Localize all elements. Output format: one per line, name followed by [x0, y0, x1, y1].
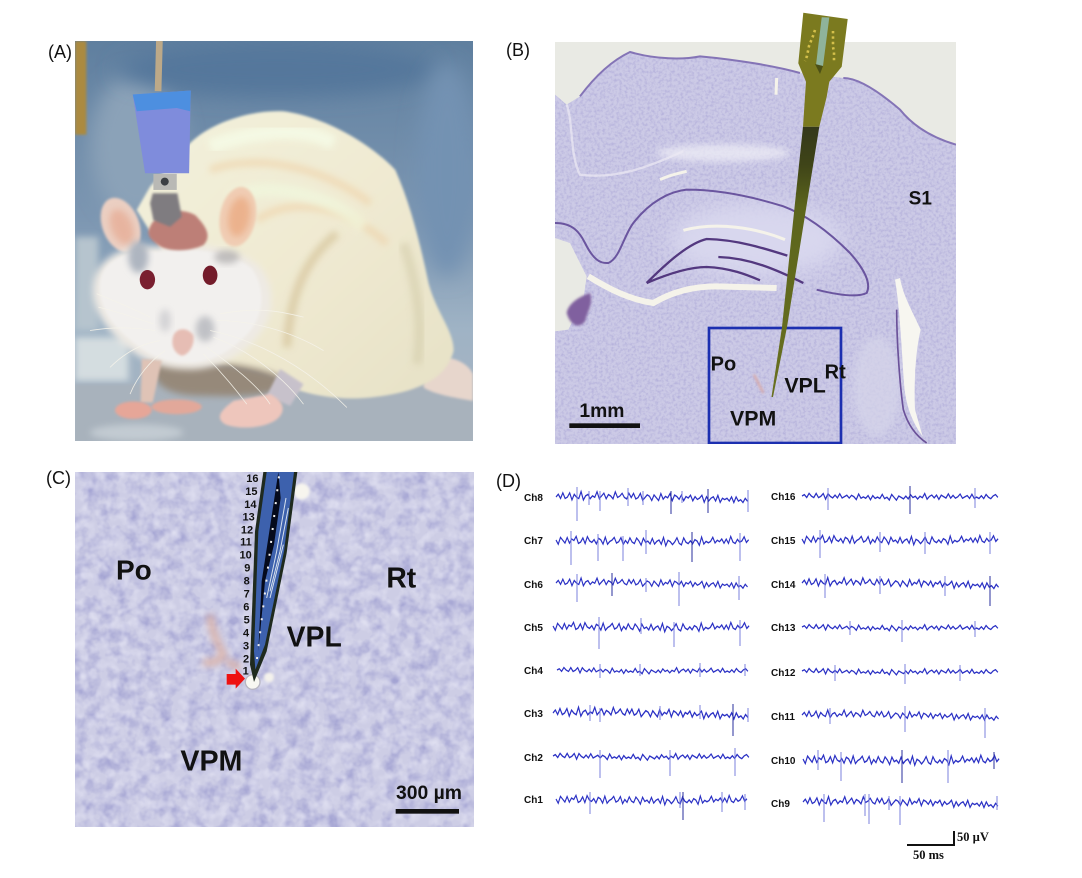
channel 16 [771, 486, 998, 514]
label: VPM: VPM [730, 407, 776, 431]
orange tissue trace [203, 615, 240, 668]
red arrow [227, 669, 245, 689]
probe tip [250, 472, 297, 682]
rat body [137, 111, 454, 398]
channel 10: Ch10 [771, 756, 796, 767]
channel 15: Ch15 [771, 536, 796, 547]
electrode site numbers: 7 [244, 589, 250, 601]
cortex edge [580, 52, 956, 145]
probe centre strip [816, 17, 829, 66]
scale bar: 50 ms / 50 µV [907, 830, 989, 862]
connector base with screw [153, 174, 177, 190]
channel 13 [771, 620, 998, 642]
lesion hole [245, 483, 310, 689]
panel label: (D): (D) [496, 471, 521, 491]
channel 10 [771, 750, 999, 783]
label: Po: Po [116, 555, 152, 586]
channel 9 [771, 794, 998, 825]
scale label: 300 µm: 300 µm [396, 783, 462, 804]
dentate gyrus [647, 239, 803, 283]
probe shank [772, 127, 819, 397]
blue region of interest box [709, 328, 841, 443]
panel label: (B): (B) [506, 40, 530, 60]
electrode site numbers: 11 [240, 537, 252, 549]
label: S1: S1 [909, 188, 932, 209]
channel 14: Ch14 [771, 580, 796, 591]
channel 14 [771, 574, 999, 606]
probe head [798, 13, 848, 127]
electrode site numbers: 15 [245, 486, 257, 498]
electrode site numbers: 1 [243, 666, 249, 678]
label: VPM: VPM [180, 746, 242, 778]
left paws [115, 399, 202, 419]
silicon probe overlay [772, 13, 848, 397]
electrode site numbers: 6 [243, 602, 249, 614]
left forelimb [141, 359, 162, 403]
panel B: brain section with probe [555, 42, 956, 444]
channel 9: Ch9 [771, 799, 790, 810]
electrode site numbers: 16 [246, 473, 258, 485]
electrode site numbers: 8 [244, 576, 250, 588]
channel 3: Ch3 [524, 709, 543, 720]
head [100, 250, 262, 363]
channel 6: Ch6 [524, 580, 543, 591]
channel 2: Ch2 [524, 753, 543, 764]
probe contact pads [805, 30, 834, 63]
channel 7: Ch7 [524, 536, 543, 547]
electrode site numbers [240, 473, 258, 678]
skull surgical site [148, 211, 208, 250]
label: Rt: Rt [825, 361, 846, 383]
purple nodule [567, 293, 591, 325]
left ear [93, 192, 148, 258]
channel 7 [524, 530, 749, 565]
channel 8: Ch8 [524, 493, 543, 504]
channel 8 [524, 487, 748, 521]
blue tape package [133, 91, 191, 173]
channel 11 [771, 706, 999, 738]
panel C: magnified thalamus with probe tip [75, 472, 474, 827]
nose [172, 329, 194, 356]
channel 1 [524, 791, 747, 820]
electrode site numbers: 2 [243, 654, 249, 666]
label: Rt: Rt [386, 562, 417, 594]
channel 16: Ch16 [771, 492, 796, 503]
scale bar: 50 ms / 50 µV: 50 ms [913, 848, 944, 862]
channel 15 [771, 530, 998, 558]
brain tissue [555, 52, 956, 444]
channel 12 [771, 664, 998, 684]
channel 12: Ch12 [771, 668, 796, 679]
channel 4 [524, 663, 748, 678]
label: VPL: VPL [784, 373, 826, 397]
panel label: (A): (A) [48, 42, 72, 62]
hippocampal layers [555, 190, 868, 295]
label: VPL: VPL [287, 621, 342, 653]
panel D: multichannel spike traces [524, 486, 999, 825]
channel 3 [524, 704, 748, 736]
electrode site numbers: 9 [244, 563, 250, 575]
right paw [220, 394, 283, 428]
electrode site numbers: 10 [240, 550, 252, 562]
label: Po: Po [711, 353, 736, 375]
head fur halo [93, 245, 272, 369]
scale bar: 50 ms / 50 µV: 50 µV [957, 830, 989, 844]
scale bar: 1mm [569, 423, 640, 428]
electrode site numbers: 3 [243, 641, 249, 653]
channel 11: Ch11 [771, 712, 795, 723]
cable [158, 41, 159, 91]
electrode site numbers: 4 [243, 628, 250, 640]
channel 13: Ch13 [771, 623, 796, 634]
electrode site numbers: 12 [241, 524, 253, 536]
electrode site numbers: 5 [244, 615, 250, 627]
channel 6 [524, 572, 748, 606]
scale label: 1mm: 1mm [579, 401, 624, 422]
right forelimb [267, 369, 304, 406]
channel 1: Ch1 [524, 795, 543, 806]
right eye [203, 266, 217, 285]
ventricle gap [895, 278, 923, 436]
whiskers [90, 294, 347, 408]
channel 5 [524, 617, 749, 649]
electrode site numbers: 14 [244, 499, 257, 511]
panel label: (C): (C) [46, 468, 71, 488]
lighter tissue patches [657, 144, 790, 162]
white tissue gaps [588, 276, 777, 303]
panel A: photo of implanted rat [75, 41, 477, 441]
right ear [215, 184, 261, 250]
channel 4: Ch4 [524, 666, 543, 677]
electrode site numbers: 13 [243, 512, 255, 524]
channel 5: Ch5 [524, 623, 543, 634]
left eye [140, 270, 155, 289]
scale bar: 300 µm [396, 809, 459, 814]
channel 2 [524, 748, 749, 778]
tail [424, 358, 473, 401]
connector stem [150, 193, 182, 227]
chest shadow [150, 357, 284, 396]
